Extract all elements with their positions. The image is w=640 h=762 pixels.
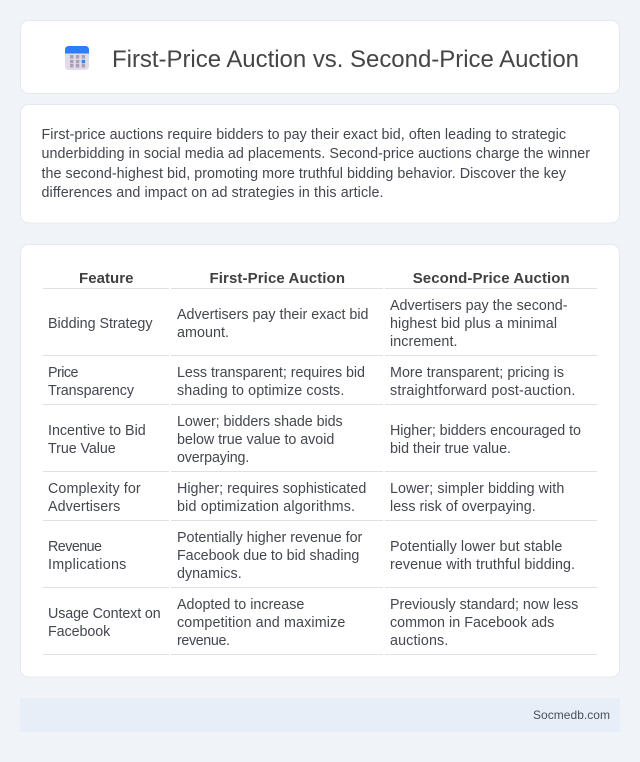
table row: incentive to bid true value: Incentive to Bid xyxy=(48,423,146,439)
table header row: Second-Price Auction xyxy=(413,270,570,287)
text block: introduction paragraph: differences and impact on ad strategies in this article. xyxy=(42,185,384,201)
table row: revenue implications: Potentially higher revenue for xyxy=(177,530,363,546)
table row: usage context on facebook: Facebook xyxy=(48,624,111,640)
table row: incentive to bid true value: Lower; bidders shade bids xyxy=(177,414,343,430)
table header row: First-Price Auction xyxy=(210,270,345,287)
text block: introduction paragraph: underbidding in social media ad placements. Second-price auctions charge the winner xyxy=(42,146,590,162)
text block: introduction paragraph: the second-highest bid, promoting more truthful bidding behavior. Discover the key xyxy=(42,166,567,182)
table row: usage context on facebook: Previously standard; now less xyxy=(390,597,578,613)
table row: revenue implications: Revenue xyxy=(48,539,102,555)
title: First-Price Auction vs. Second-Price Auction xyxy=(112,46,579,73)
table header row: Feature xyxy=(79,270,134,287)
icon: calendar xyxy=(65,46,89,70)
table row: usage context on facebook: Adopted to increase xyxy=(177,597,304,613)
table row: price transparency: shading to optimize costs. xyxy=(177,383,344,399)
table row: usage context on facebook: revenue. xyxy=(177,633,230,649)
table row: usage context on facebook: competition and maximize xyxy=(177,615,345,631)
table row: revenue implications xyxy=(43,530,597,588)
table row: revenue implications: Implications xyxy=(48,557,126,573)
table row: usage context on facebook xyxy=(43,597,597,655)
footer source text: Socmedb.com xyxy=(533,708,610,722)
table row: complexity for advertisers: Higher; requires sophisticated xyxy=(177,481,366,497)
text block: introduction paragraph xyxy=(42,127,590,201)
table row: incentive to bid true value xyxy=(43,414,597,472)
table row: price transparency: Transparency xyxy=(48,383,135,399)
text block: introduction paragraph: First-price auctions require bidders to pay their exact bid, often leading to strategic xyxy=(42,127,566,143)
table row: usage context on facebook: common in Facebook ads xyxy=(390,615,554,631)
table row: incentive to bid true value: True Value xyxy=(48,441,116,457)
table row: bidding strategy: amount. xyxy=(177,325,229,341)
table row: usage context on facebook: auctions. xyxy=(390,633,448,649)
table row: price transparency: Price xyxy=(48,365,79,381)
table row: bidding strategy: highest bid plus a minimal xyxy=(390,316,557,332)
table row: price transparency: More transparent; pricing is xyxy=(390,365,564,381)
table header row xyxy=(43,270,597,289)
table row: price transparency: straightforward post-auction. xyxy=(390,383,575,399)
table row: incentive to bid true value: overpaying. xyxy=(177,450,249,466)
panel: introduction xyxy=(20,104,620,223)
table row: incentive to bid true value: below true value to avoid xyxy=(177,432,334,448)
table row: revenue implications: Facebook due to bid shading xyxy=(177,548,359,564)
table row: bidding strategy: Advertisers pay the second- xyxy=(390,298,568,314)
table row: complexity for advertisers: less risk of overpaying. xyxy=(390,499,536,515)
table row: bidding strategy xyxy=(43,298,597,356)
footer bar xyxy=(20,698,620,732)
table row: bidding strategy: increment. xyxy=(390,334,458,350)
table row: price transparency: Less transparent; requires bid xyxy=(177,365,365,381)
table row: price transparency xyxy=(43,365,597,405)
table row: revenue implications: dynamics. xyxy=(177,566,242,582)
table row: complexity for advertisers: bid optimization algorithms. xyxy=(177,499,355,515)
table row: incentive to bid true value: bid their true value. xyxy=(390,441,511,457)
table row: complexity for advertisers: Advertisers xyxy=(48,499,120,515)
table row: usage context on facebook: Usage Context on xyxy=(48,606,161,622)
table row: complexity for advertisers xyxy=(43,481,597,521)
panel: comparison table xyxy=(20,244,620,677)
table row: revenue implications: Potentially lower but stable xyxy=(390,539,562,555)
table row: bidding strategy: Bidding Strategy xyxy=(48,316,153,332)
table row: revenue implications: revenue with truthful bidding. xyxy=(390,557,575,573)
panel: header xyxy=(20,20,620,94)
table row: incentive to bid true value: Higher; bidders encouraged to xyxy=(390,423,581,439)
table row: complexity for advertisers: Lower; simpler bidding with xyxy=(390,481,564,497)
table row: bidding strategy: Advertisers pay their exact bid xyxy=(177,307,369,323)
table row: complexity for advertisers: Complexity for xyxy=(48,481,141,497)
